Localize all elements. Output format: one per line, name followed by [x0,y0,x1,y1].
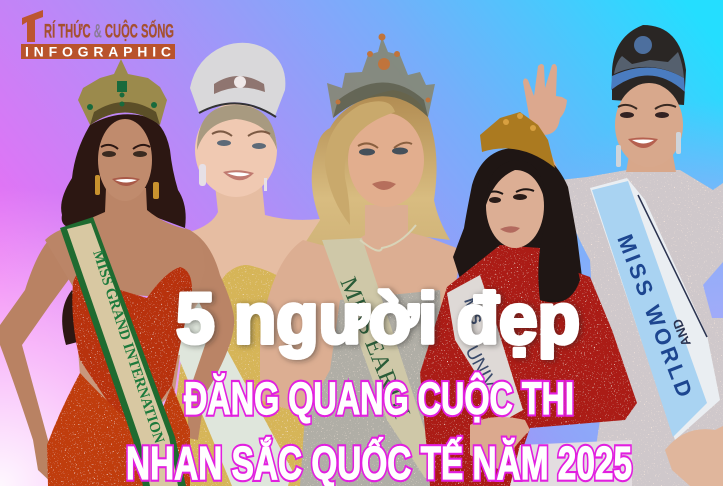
logo big T [22,10,43,42]
body and neck [180,185,330,310]
contestant 5: Miss World, silver gown [560,25,723,486]
sash [172,300,292,486]
eyes and mouth [212,131,270,180]
gold earrings [95,175,159,199]
face [348,113,424,207]
white skirt [510,440,632,486]
fringe hair [486,160,546,205]
waist cutout [78,350,180,430]
tiara [327,34,435,118]
contestant 3: blonde hair, silver dress [260,34,462,486]
contestant 1: Miss Grand International, red dress [0,59,234,486]
sash text: MISS GRAND INTERNATION [89,248,167,445]
sash [60,217,186,486]
chest and neck [45,188,205,300]
infographic banner: INFOGRAPHIC [25,44,171,60]
right arm [185,228,234,440]
white sash [590,178,720,440]
contestant 4: Miss Universe, red ao dai [420,64,637,486]
gold and emerald crown [78,59,167,125]
headline: 5 nguoi dep: 5 người đẹp [176,280,580,359]
facial features [358,143,412,190]
subtitle line 1: ĐĂNG QUANG CUỘC THI [184,373,574,424]
necklace [360,225,416,251]
face [486,164,544,248]
sash text: MIS [460,296,485,327]
head [195,103,277,197]
hair sweep [325,101,395,225]
face [615,83,683,167]
gold dress [165,265,312,486]
sash text: MISS WORLD [612,231,697,400]
facial features [101,145,150,186]
logo wordmark: RÍ THỨC & CUỘC SỐNG [44,20,174,42]
sash small text: AND [669,317,694,348]
arm and chest [260,205,462,420]
face [98,119,152,201]
back hair [303,90,450,307]
blue crown [611,36,685,92]
logo: Tri Thuc & Cuoc Song Infographic [21,10,175,60]
subtitle line 1: ĐĂNG QUANG CUỘC THI [184,373,574,424]
back hair [61,114,186,228]
contestant 2: white crown, gold dress [165,43,330,486]
left arm [0,231,72,486]
dress and sleeve [420,245,637,486]
hair line [197,105,277,150]
clasped hands [470,417,530,470]
blue sash band [592,181,707,437]
earrings [199,164,267,191]
sash [447,275,523,420]
gold crown [480,112,555,168]
facial features [486,189,534,233]
neck [626,150,676,172]
sash text: UNIV [461,342,501,393]
sash text: MISS EARTH [334,274,415,422]
hand [665,426,723,486]
sash [322,238,442,480]
facial features [618,105,676,148]
sash edge [638,195,707,337]
earrings [616,132,681,167]
white crown [190,43,285,117]
silver dress [300,290,450,486]
hair strands by waist [62,290,84,345]
raised hand [523,64,567,170]
gown [560,170,723,486]
hair front locks [538,225,580,302]
red bodice [72,267,192,430]
red skirt [47,373,190,486]
dark hair [612,25,686,105]
back hair [453,148,583,310]
